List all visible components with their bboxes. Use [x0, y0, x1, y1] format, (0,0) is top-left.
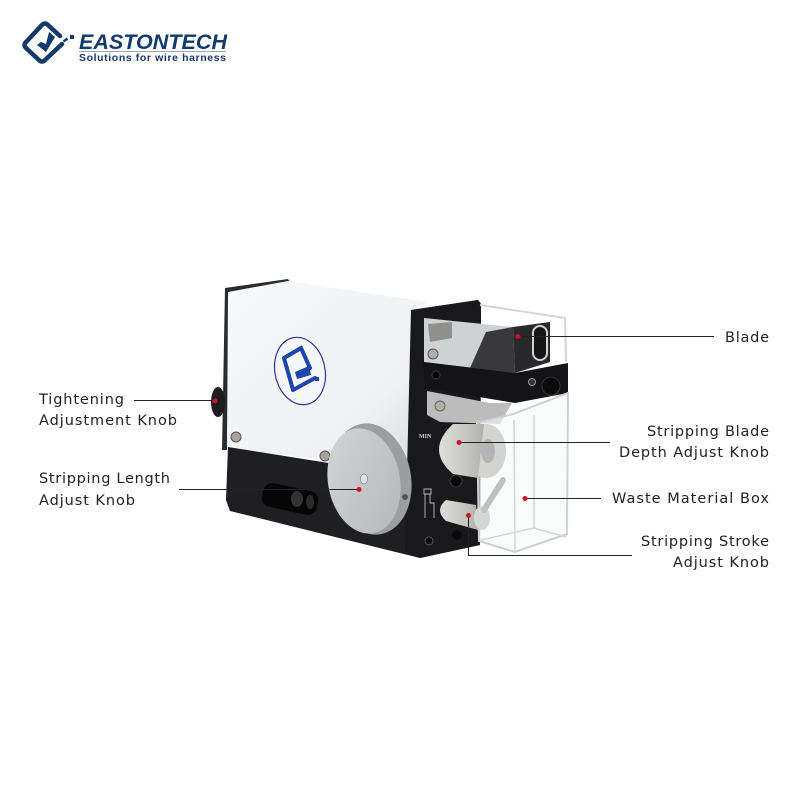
callout: Stripping Length Adjust Knob: Stripping Length	[39, 471, 170, 487]
callout: Stripping Length Adjust Knob: Adjust Knob	[39, 493, 135, 509]
callout: Stripping Blade Depth Adjust Knob	[456, 424, 769, 461]
waste material box	[477, 393, 568, 552]
blade depth knob	[439, 424, 506, 478]
machine: back edge	[222, 279, 290, 450]
screws on cover	[231, 432, 330, 461]
black clamp bar	[423, 362, 568, 403]
callout: Stripping Blade Depth Adjust Knob: Depth Adjust Knob	[619, 445, 769, 461]
machine: front face	[405, 300, 481, 558]
callout: Stripping Stroke Adjust Knob: Adjust Knob	[673, 555, 769, 571]
stripping length dial	[319, 417, 420, 541]
lower blade block	[427, 391, 512, 424]
callout: Stripping Stroke Adjust Knob: Stripping Stroke	[641, 534, 769, 550]
callout: Blade: Blade	[725, 330, 769, 346]
brand name: EASTONTECH	[79, 30, 227, 54]
tightening knob	[211, 387, 225, 417]
stroke knob	[440, 480, 503, 530]
logo: Eastontech	[24, 24, 227, 64]
panel marks: MIN	[419, 434, 432, 440]
callout: Waste Material Box: Waste Material Box	[612, 491, 769, 507]
callout: Stripping Blade Depth Adjust Knob: Stripping Blade	[647, 424, 769, 440]
upper blade housing	[424, 305, 566, 373]
callout: Stripping Stroke Adjust Knob	[466, 513, 769, 571]
panel marks	[419, 434, 462, 545]
slot in base	[260, 481, 320, 517]
machine: white cover	[227, 281, 428, 470]
callout: Tightening Adjustment Knob: Adjustment Knob	[39, 413, 177, 429]
callout: Tightening Adjustment Knob: Tightening	[38, 392, 124, 408]
callout: Tightening Adjustment Knob	[38, 392, 218, 429]
icon: logo diamond mark	[24, 24, 74, 62]
callout: Blade	[516, 330, 769, 346]
machine illustration	[211, 279, 568, 558]
callout: Waste Material Box	[522, 491, 769, 507]
callout: Stripping Length Adjust Knob	[39, 471, 362, 509]
cover logo sticker	[268, 333, 332, 409]
machine: black base	[226, 300, 481, 558]
tagline: Solutions for wire harness	[79, 52, 226, 64]
brand underline	[79, 50, 226, 53]
